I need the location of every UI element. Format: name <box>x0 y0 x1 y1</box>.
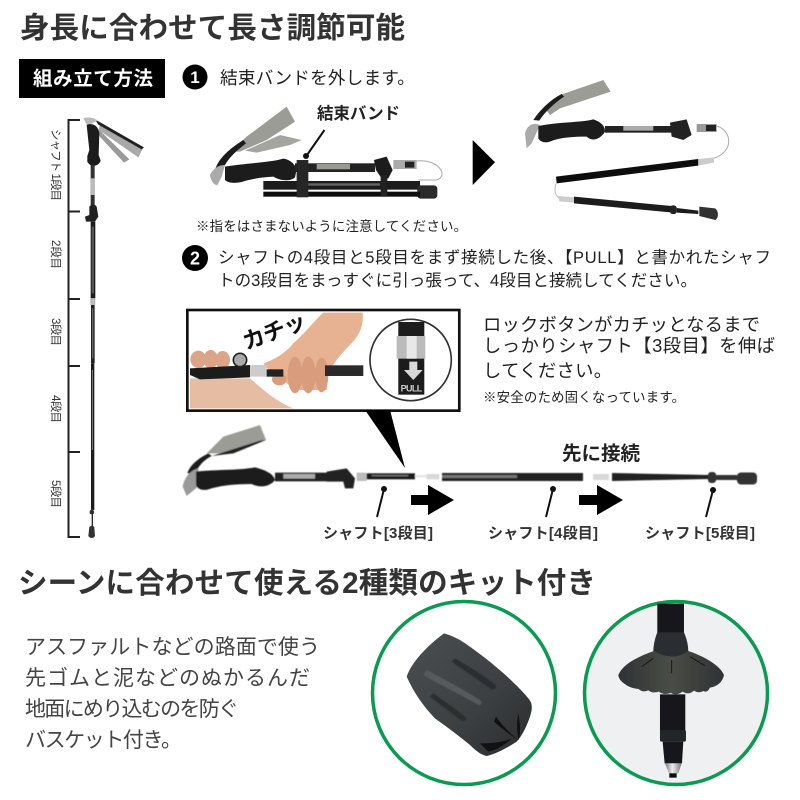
kit description: 先ゴムと泥などのぬかるんだ <box>25 667 310 690</box>
grip and shaft 3 <box>183 425 439 496</box>
panel: pole sections in a line <box>183 425 757 496</box>
step 1 number: 1 <box>190 68 200 87</box>
right hand fingers <box>272 357 328 393</box>
strap <box>230 107 295 152</box>
vertical shaft section labels: 5段目 <box>49 480 63 508</box>
pointer: shaft 3 <box>377 486 387 517</box>
step 2 text <box>218 248 771 290</box>
label: shaft 5: シャフト[5段目] <box>645 524 755 542</box>
panel: unfolded pole <box>525 80 729 220</box>
step 2 number: 2 <box>190 248 200 268</box>
vertical trekking pole <box>83 118 144 538</box>
step 1 number <box>182 64 208 90</box>
step 2 text: シャフトの4段目と5段目をまず接続した後、【PULL】と書かれたシャフ <box>218 248 771 267</box>
arrow: shaft 4 to shaft 5 <box>579 485 623 515</box>
lock detail inset <box>370 319 451 401</box>
right hand <box>263 313 363 390</box>
icon: basket and pole tip <box>618 604 724 778</box>
assembly method label <box>19 59 165 98</box>
step 2 text: トの3段目をまっすぐに引っ張って、4段目と接続してください。 <box>218 271 697 290</box>
lock button explanation: してください。 <box>483 360 612 381</box>
lock button explanation: ロックボタンがカチッとなるまで <box>483 314 760 335</box>
kit description <box>25 636 320 752</box>
title: 身長に合わせて長さ調節可能 <box>20 12 405 45</box>
shaft section bracket <box>68 120 80 537</box>
assembly method label: 組み立て方法 <box>33 67 153 90</box>
vertical shaft section labels <box>49 129 63 508</box>
arrow: step 1 right triangle <box>473 140 495 185</box>
vertical shaft section labels: 4段目 <box>49 395 63 423</box>
shaft 5 <box>612 473 710 481</box>
vertical shaft section labels: シャフト 1段目 <box>49 129 63 201</box>
panel: folded pole with binding band <box>210 107 442 199</box>
vertical shaft section labels: 2段目 <box>49 240 63 269</box>
left palm <box>190 378 293 408</box>
grip <box>225 159 297 183</box>
strap <box>545 80 611 115</box>
kit description: 地面にめり込むのを防ぐ <box>25 698 239 721</box>
gap with silver joint <box>593 474 609 480</box>
pole in hand <box>190 365 250 379</box>
shaft 5 ring and rubber tip <box>708 472 757 484</box>
safety note: ※安全のため固くなっています。 <box>483 390 685 405</box>
left hand <box>190 350 230 369</box>
lock button explanation <box>483 314 775 381</box>
lock button explanation: しっかりシャフト【3段目】を伸ば <box>483 335 775 356</box>
panel: full pole with shaft length scale <box>49 118 144 538</box>
panel: basket attachment <box>584 602 768 784</box>
panel: photo of locking the shaft <box>187 310 459 411</box>
binding band pointer <box>303 130 324 159</box>
connect first label: 先に接続 <box>562 443 640 465</box>
icon: rubber tip <box>407 633 532 756</box>
shaft 4 <box>442 473 583 481</box>
step 1 text: 結束バンドを外します。 <box>220 68 415 88</box>
label: shaft 4: シャフト[4段目] <box>488 524 598 542</box>
pointer: shaft 5 <box>706 487 716 517</box>
section heading: シーンに合わせて使える2種類のキット付き <box>18 567 596 600</box>
step 2 number <box>182 245 208 271</box>
lock detail inset: PULL <box>401 384 423 394</box>
pointer: shaft 4 <box>546 486 556 517</box>
finger caution note: ※指をはさまないように注意してください。 <box>196 219 467 234</box>
click sound text: カチッ <box>239 309 310 355</box>
vertical shaft section labels: 3段目 <box>49 318 63 346</box>
arrow: shaft 3 to shaft 4 <box>411 485 454 515</box>
binding band label: 結束バンド <box>317 104 400 123</box>
panel: rubber tip <box>372 602 556 784</box>
kit description: バスケット付き。 <box>25 729 182 752</box>
shaft 4 marking <box>442 475 517 478</box>
label: shaft 3: シャフト[3段目] <box>323 524 433 542</box>
callout pointer <box>365 410 405 468</box>
kit description: アスファルトなどの路面で使う <box>25 636 320 659</box>
grip <box>538 119 605 142</box>
